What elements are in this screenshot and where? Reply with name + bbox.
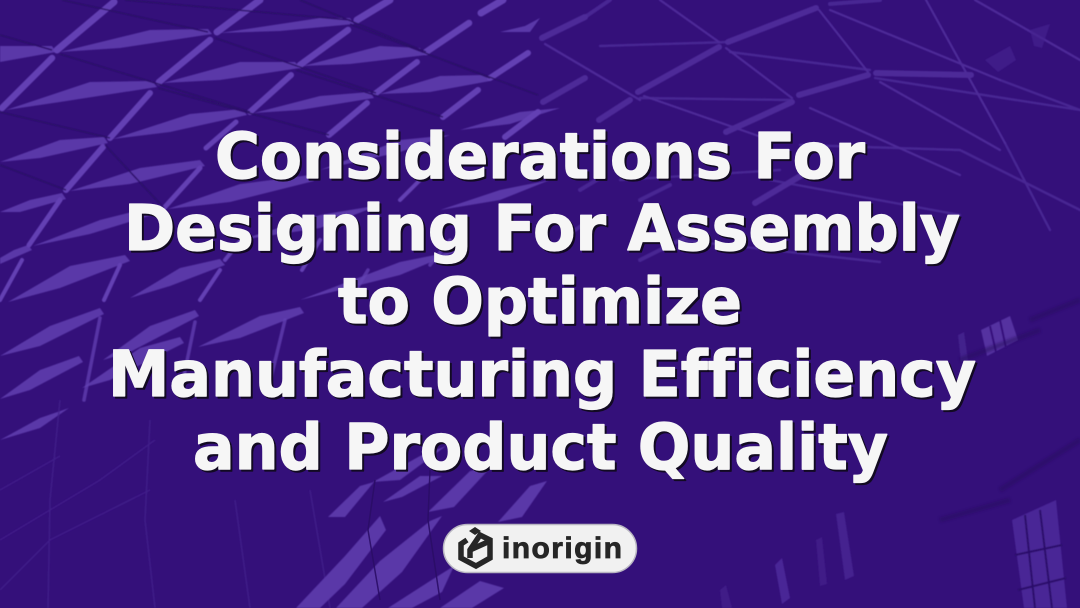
title text lines: and Product Quality	[193, 411, 888, 484]
title text lines: Designing For Assembly	[124, 192, 960, 265]
title shadow	[110, 122, 978, 486]
title shadow: Considerations For	[217, 122, 867, 195]
title shadow: and Product Quality	[195, 413, 890, 486]
logo badge	[444, 524, 636, 572]
title shadow: Manufacturing Efficiency	[110, 340, 978, 413]
background: lit windows lower right	[720, 316, 1067, 608]
icon: hexagonal cube logo mark	[461, 527, 490, 566]
title	[108, 120, 978, 486]
background: bottom lattice cluster behind logo	[296, 446, 547, 608]
title text lines: Manufacturing Efficiency	[108, 338, 976, 411]
title shadow: Designing For Assembly	[126, 194, 962, 267]
logo wordmark: inorigin	[502, 532, 622, 565]
title text lines: to Optimize	[338, 265, 742, 338]
title shadow: to Optimize	[340, 267, 744, 340]
title text lines	[108, 120, 976, 484]
title text lines: Considerations For	[215, 120, 865, 193]
